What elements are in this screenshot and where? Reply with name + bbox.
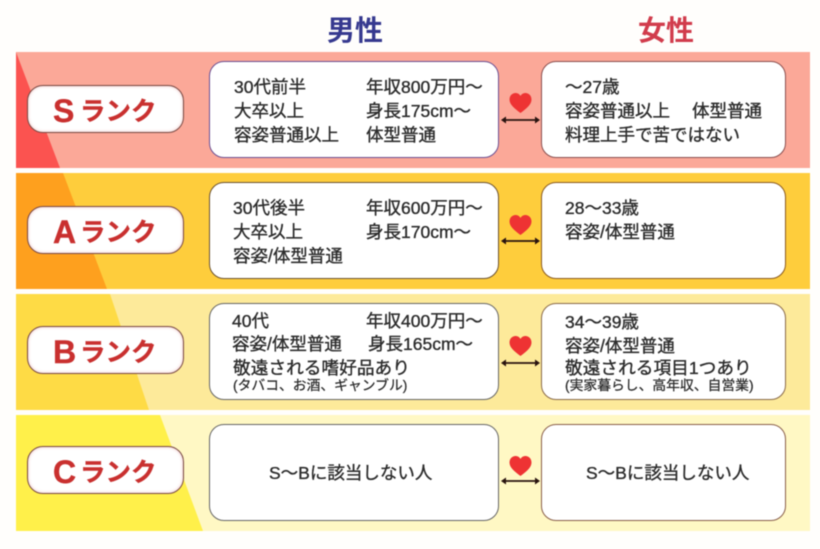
male note: B rank: (タバコ、お酒、ギャンブル) xyxy=(233,378,407,393)
male text: S rank: 30代前半 xyxy=(234,77,306,97)
female text: B rank: 容姿/体型普通 xyxy=(565,336,675,356)
label: S rank xyxy=(27,85,184,133)
male text: S rank income xyxy=(366,77,483,145)
female text: S rank: ～27歳 xyxy=(565,77,619,97)
label: C rank: ランク xyxy=(80,459,157,487)
label: S rank: ランク xyxy=(80,98,157,126)
male text: A rank: 大卒以上 xyxy=(233,222,303,242)
heading: female: 女性 xyxy=(638,15,694,46)
male text: S rank income: 身長175cm～ xyxy=(366,101,471,121)
male card: A rank xyxy=(209,182,499,279)
female text: S rank: 容姿普通以上 体型普通 xyxy=(565,101,762,121)
panel: C rank band xyxy=(16,415,810,531)
icon: heart and arrow B xyxy=(500,335,540,367)
icon: heart and arrow A xyxy=(500,214,540,245)
panel: S rank band xyxy=(16,52,810,168)
icon: heart and arrow C xyxy=(500,455,540,485)
male text: A rank income: 身長170cm～ xyxy=(366,222,471,242)
female text: B rank: 34～39歳 xyxy=(565,312,639,332)
male text: A rank income: 年収600万円～ xyxy=(366,198,483,218)
label: A rank: A xyxy=(53,214,76,250)
label: A rank xyxy=(27,206,184,254)
male text: B rank income: 身長165cm～ xyxy=(368,334,473,354)
label: A rank: ランク xyxy=(80,219,157,247)
male text: A rank: 容姿/体型普通 xyxy=(233,246,343,266)
male text: S rank xyxy=(234,77,340,145)
male text: B rank: 容姿/体型普通 xyxy=(232,334,342,354)
female note: B rank: (実家暮らし、高年収、自営業) xyxy=(565,378,754,393)
male text: S rank income: 年収800万円～ xyxy=(366,77,483,97)
female text: S rank: 料理上手で苦ではない xyxy=(565,125,740,145)
male text: S rank income: 体型普通 xyxy=(366,125,436,145)
male text: S rank: 容姿普通以上 xyxy=(234,125,339,145)
panel: A rank band xyxy=(16,173,810,289)
female card: C rank xyxy=(541,424,786,521)
male text: S rank: 大卒以上 xyxy=(234,101,304,121)
male text: B rank income: 年収400万円～ xyxy=(366,311,483,331)
male card: C rank xyxy=(209,424,499,521)
icon: heart and arrow S xyxy=(500,92,540,124)
panel: B rank band xyxy=(16,294,810,410)
female card: B rank xyxy=(541,303,786,400)
male text: C rank: S～Bに該当しない人 xyxy=(269,463,432,483)
label: B rank: ランク xyxy=(80,339,157,367)
label: C rank: C xyxy=(53,454,76,490)
male card: S rank xyxy=(209,61,499,158)
female text: B rank xyxy=(564,312,676,356)
male text: B rank hobby: 敬遠される嗜好品あり xyxy=(233,358,410,378)
female card: A rank xyxy=(541,182,786,279)
male text: A rank: 30代後半 xyxy=(233,198,305,218)
female text: A rank xyxy=(564,198,676,242)
male text: B rank: 40代 xyxy=(232,311,269,331)
female text: A rank: 28～33歳 xyxy=(565,198,639,218)
label: B rank xyxy=(27,326,184,374)
label: S rank: S xyxy=(53,93,74,129)
label: B rank: B xyxy=(53,334,76,370)
female text: S rank xyxy=(564,76,762,145)
male text: A rank xyxy=(232,198,344,266)
female text: C rank: S～Bに該当しない人 xyxy=(586,463,749,483)
male card: B rank xyxy=(209,303,499,400)
heading: male: 男性 xyxy=(327,15,383,46)
male text: A rank income xyxy=(366,198,483,242)
female text: A rank: 容姿/体型普通 xyxy=(565,222,675,242)
female text: B rank item: 敬遠される項目1つあり xyxy=(565,358,752,378)
male text: B rank income xyxy=(366,311,483,354)
male text: B rank xyxy=(231,311,342,354)
label: C rank xyxy=(27,446,184,494)
female card: S rank xyxy=(541,61,786,158)
